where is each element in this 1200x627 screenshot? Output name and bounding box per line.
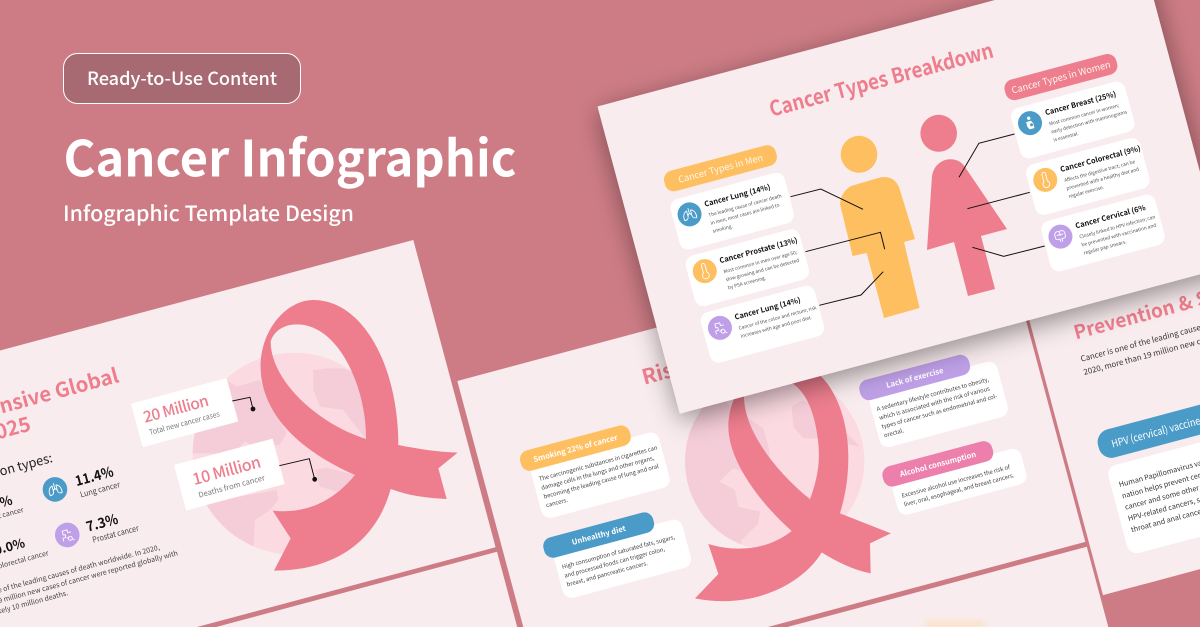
card: lung 14 xyxy=(668,171,796,252)
illustration: globe and ribbon xyxy=(680,360,891,601)
card: colorectal: prevented with a healthy diet and xyxy=(1066,166,1140,192)
card: unhealthy diet: High consumption of saturated fats, sugars, xyxy=(561,532,676,571)
card: prostate xyxy=(684,227,811,308)
card: breast: is essential. xyxy=(1053,130,1079,143)
header badge: Ready-to-Use Content xyxy=(87,65,277,91)
stat: breast cancer xyxy=(0,487,25,527)
card: alcohol consumption: Alcohol consumption xyxy=(898,449,977,480)
card: breast: Cancer Breast (25%) xyxy=(1044,89,1118,118)
stat: colorectal cancer xyxy=(0,527,50,573)
title: Cancer Types Breakdown xyxy=(766,35,997,124)
card: lack of exercise: A sedentary lifestyle contributes to obesity, xyxy=(876,374,990,413)
panel: lower left slide xyxy=(216,552,517,627)
stat: lung cancer: Lung cancer xyxy=(79,479,122,500)
card: lung 14: The leading cause of cancer death xyxy=(708,192,782,219)
card: unhealthy diet: breast, and pancreatic cancers. xyxy=(565,558,649,588)
subtitle: Infographic Template Design xyxy=(63,198,354,228)
card: breast xyxy=(1009,80,1136,160)
label: cancer types in women: Cancer Types in Women xyxy=(1010,57,1112,97)
card: unhealthy diet xyxy=(541,503,693,602)
card: hpv vaccine: cancer and some other xyxy=(1124,483,1200,513)
figure: man xyxy=(840,136,920,318)
callout: 10 million: Deaths from cancer xyxy=(197,472,266,501)
callout leader lines xyxy=(232,397,317,482)
title: risk factors: Risk Factors xyxy=(638,330,766,392)
card: colorectal: Cancer Colorectal (9%) xyxy=(1059,143,1142,175)
card: lack of exercise xyxy=(857,346,1010,451)
callout: 10 million: 10 Million xyxy=(189,449,263,490)
card: lung colon: Cancer of the colon and rectum; risk xyxy=(738,304,818,332)
illustration: globe and ribbon xyxy=(187,300,458,571)
stat: prostate cancer: 7.3% xyxy=(84,509,121,537)
card: colorectal xyxy=(1024,136,1152,217)
callout: 20 million: 20 Million xyxy=(141,389,211,428)
card: lung 14: in men; most cases are linked to xyxy=(710,202,780,227)
card: smoking: damage cells in the lungs and other organs, xyxy=(540,453,655,492)
callout: 20 million xyxy=(131,378,238,447)
card: smoking: becoming the leading cause of lung and oral xyxy=(542,461,660,501)
panel: risk factors slide xyxy=(457,321,1086,627)
card: lack of exercise: types of cancer such as endometrial and col- xyxy=(880,391,998,431)
label: cancer types in men: Cancer Types in Men xyxy=(676,150,764,186)
card: lung colon xyxy=(699,284,826,365)
label: cancer types in men xyxy=(662,143,779,193)
card: smoking: cancers. xyxy=(545,495,569,509)
card: alcohol consumption: liver, oral, esophageal, and breast cancers. xyxy=(903,470,1015,508)
card: colorectal: regular exercise. xyxy=(1068,184,1105,200)
card: breast: early detection with mammograms xyxy=(1050,108,1129,135)
figures: man and woman with leader lines xyxy=(791,115,1045,318)
card: cervical: regular pap smears. xyxy=(1083,238,1127,257)
header badge xyxy=(64,54,300,104)
main title: Cancer Infographic xyxy=(64,120,516,192)
card: prostate: Cancer Prostate (13%) xyxy=(718,235,799,266)
panel: global overview slide xyxy=(0,240,496,627)
card: smoking xyxy=(518,417,672,522)
card: smoking: Smoking 22% of cancer xyxy=(532,432,620,465)
card: cervical xyxy=(1039,193,1167,273)
card: hpv vaccine xyxy=(1095,381,1200,556)
leader lines xyxy=(791,134,1045,305)
card: unhealthy diet: and processed foods can trigger colon, xyxy=(563,544,666,580)
card: lung 14: Cancer Lung (14%) xyxy=(703,181,772,210)
card: colorectal: Affects the digestive tract; can be xyxy=(1063,158,1136,184)
callout: 10 million xyxy=(174,439,285,510)
card: lack of exercise: orectal. xyxy=(883,425,905,439)
card: unhealthy diet: Unhealthy diet xyxy=(571,523,628,548)
card: lack of exercise: Lack of exercise xyxy=(885,365,945,391)
card: lack of exercise: which is associated with the risk of various xyxy=(878,383,991,422)
label: cancer types in women xyxy=(1002,52,1119,102)
stat: lung cancer xyxy=(40,460,122,510)
panel: prevention and screening slide xyxy=(1021,142,1200,595)
card: prostate: by PSA screening. xyxy=(727,274,767,291)
figure: woman xyxy=(920,115,1007,296)
card: prostate: slow growing and can be detected xyxy=(725,257,800,283)
card: cervical: Cancer Cervical (6% xyxy=(1074,202,1147,231)
card: cervical: be prevented with vaccination and xyxy=(1081,222,1157,248)
card: smoking: The carcinogenic substances in cigarettes can xyxy=(538,442,659,483)
card: lung 14: smoking. xyxy=(712,223,733,235)
card: alcohol consumption: Excessive alcohol use increases the risk of xyxy=(900,462,1012,500)
card: prostate: Most common in men over age 50; xyxy=(723,249,799,275)
stat: prostate cancer xyxy=(52,504,141,555)
callout: 20 million: Total new cancer cases xyxy=(148,408,221,438)
card: alcohol consumption xyxy=(880,432,1028,518)
card: cervical: Closely linked to HPV infection; can xyxy=(1079,213,1156,240)
stat: prostate cancer: Prostat cancer xyxy=(91,523,141,546)
card: breast: Most common cancer in women; xyxy=(1048,102,1121,127)
panel: cancer types breakdown slide xyxy=(598,0,1200,416)
card: lung colon: increases with age and poor diet. xyxy=(740,314,813,340)
panel: lower middle slide xyxy=(787,547,1108,627)
card: lung colon: Cancer Lung (14%) xyxy=(733,294,802,323)
stat: lung cancer: 11.4% xyxy=(73,461,116,491)
